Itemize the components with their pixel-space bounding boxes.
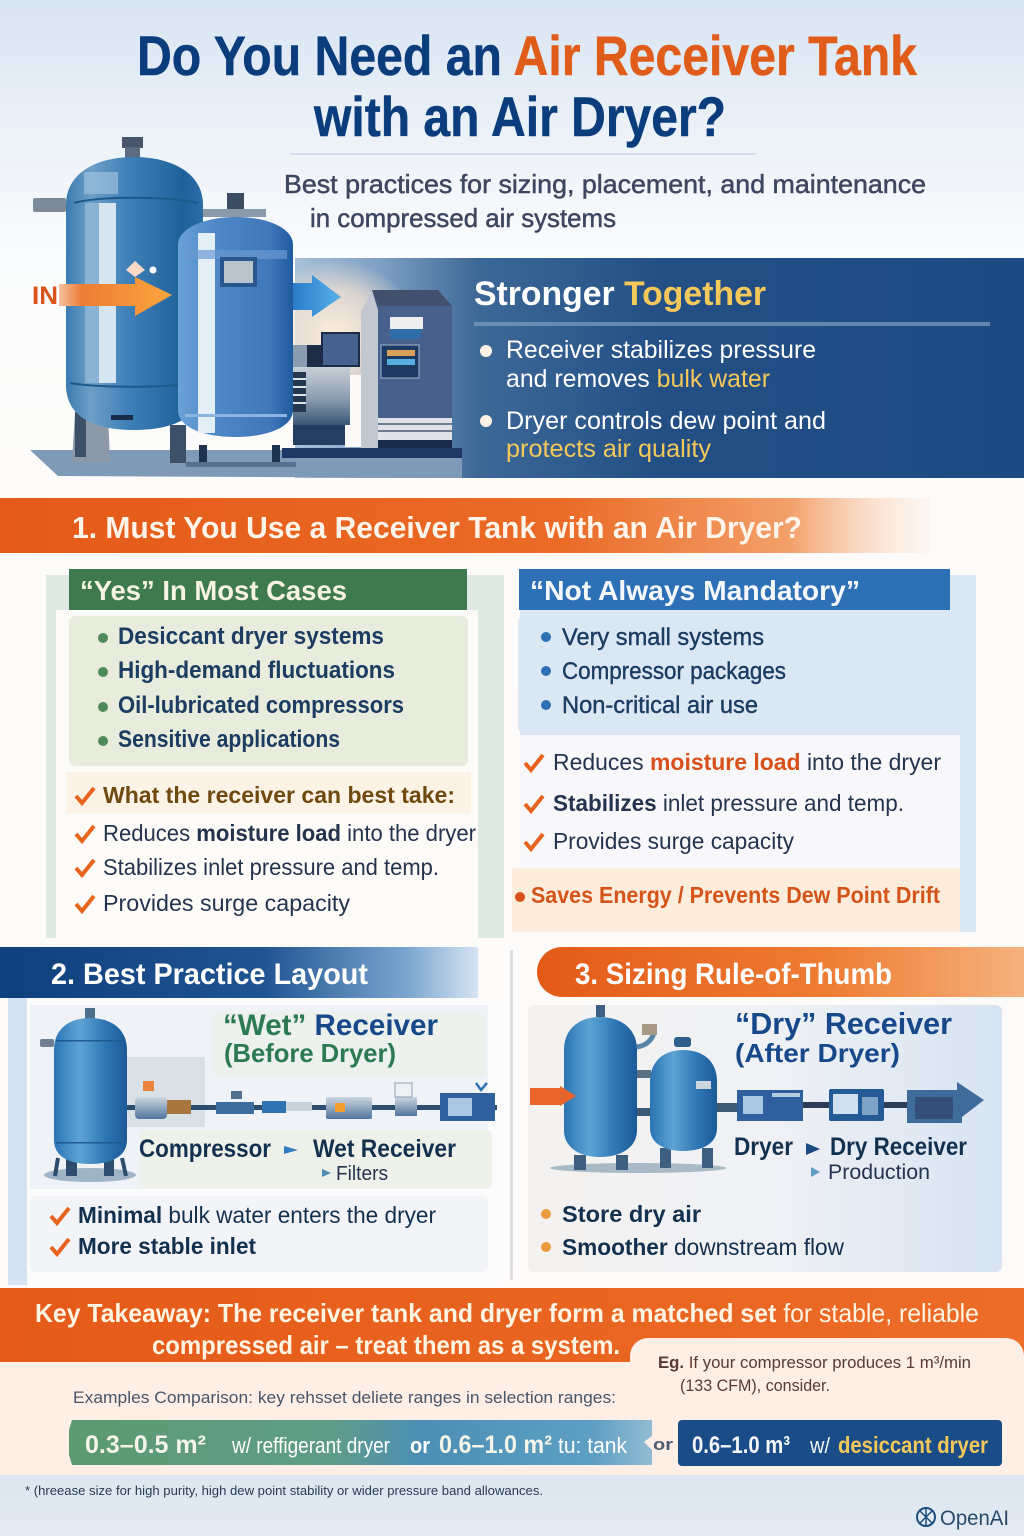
checklist: receiver benefits: Provides surge capacity <box>103 890 350 916</box>
key takeaway band: Key Takeaway: The receiver tank and dryer form a matched set for stable, reliable <box>35 1298 979 1328</box>
callout: saves energy: Saves Energy / Prevents Dew Point Drift <box>531 882 940 908</box>
labels: wet flow: Compressor <box>139 1135 271 1163</box>
list: dry receiver benefits: Smoother downstream flow <box>562 1234 844 1260</box>
pill: desiccant dryer range: desiccant dryer <box>838 1432 988 1458</box>
callout: saves energy <box>512 868 960 932</box>
bullet: receiver <box>480 336 816 393</box>
checklist: dryer benefits: Reduces moisture load into the dryer <box>553 749 941 775</box>
checklist: receiver benefits: Stabilizes inlet pressure and temp. <box>103 854 439 880</box>
subtitle <box>284 153 926 233</box>
text: sizing example <box>658 1353 971 1395</box>
list: not mandatory cases: Compressor packages <box>562 658 786 685</box>
heading: not always <box>519 569 950 610</box>
heading: dry receiver: “Dry” Receiver <box>735 1006 952 1041</box>
heading: wet receiver <box>212 1009 486 1078</box>
section 1 heading band <box>0 498 930 553</box>
pill: refrigerant dryer range: or <box>410 1433 430 1458</box>
pill: refrigerant dryer range: tu: tank <box>558 1433 628 1458</box>
checklist: dryer benefits: Stabilizes inlet pressure and temp. <box>553 790 904 816</box>
arrow: dry air in <box>530 1086 576 1106</box>
checklist: receiver benefits <box>66 772 476 916</box>
icon: wet receiver tank <box>40 1008 136 1182</box>
section 1 heading band: 1. Must You Use a Receiver Tank with an Air Dryer? <box>72 510 802 545</box>
text: sizing example: (133 CFM), consider. <box>680 1376 830 1395</box>
subtitle: Best practices for sizing, placement, and maintenance <box>284 169 926 199</box>
pill: refrigerant dryer range: 0.3–0.5 m² <box>85 1431 206 1459</box>
list: yes cases <box>69 616 468 766</box>
logo: OpenAI: OpenAI <box>940 1507 1009 1530</box>
heading: stronger together: Stronger Together <box>474 275 766 313</box>
checklist: receiver benefits: Reduces moisture load into the dryer <box>103 820 476 846</box>
checklist: dryer benefits <box>525 749 941 854</box>
pill: refrigerant dryer range <box>69 1420 652 1465</box>
checklist: wet receiver benefits: More stable inlet <box>78 1233 256 1259</box>
icon: dry receiver tanks <box>550 1005 726 1173</box>
panel: stronger together banner <box>250 258 1024 478</box>
section 2 heading band: 2. Best Practice Layout <box>51 958 368 991</box>
list: not mandatory cases: Very small systems <box>562 624 764 651</box>
heading: dry receiver <box>735 1006 952 1068</box>
panel: yes in most cases <box>46 569 504 938</box>
subtitle: in compressed air systems <box>310 203 616 233</box>
list: yes cases: Sensitive applications <box>118 726 340 753</box>
bullet: dryer <box>480 407 826 463</box>
heading: yes <box>69 569 467 610</box>
heading: not always: “Not Always Mandatory” <box>530 575 860 606</box>
bullet: receiver: and removes bulk water <box>506 365 770 393</box>
footer background <box>0 1475 1024 1536</box>
panel: lower peach background <box>0 1362 1024 1475</box>
list: not mandatory cases <box>518 616 951 733</box>
labels: wet flow: Filters <box>336 1163 388 1185</box>
list: yes cases: Desiccant dryer systems <box>118 623 384 650</box>
checklist: wet receiver benefits <box>30 1196 488 1272</box>
labels: wet flow: Wet Receiver <box>313 1135 456 1163</box>
diagram: wet pipeline <box>127 1057 497 1127</box>
pill: desiccant dryer range: w/ <box>809 1433 831 1458</box>
text: or: or <box>653 1435 673 1454</box>
pill: refrigerant dryer range: w/ reffigerant dryer <box>231 1433 390 1458</box>
icon: air dryer cabinet <box>361 290 452 448</box>
text: sizing example: Eg. If your compressor produces 1 m³/min <box>658 1353 971 1372</box>
key takeaway band: compressed air – treat them as a system. <box>152 1330 620 1360</box>
heading: wet receiver: “Wet” Receiver <box>223 1009 438 1042</box>
heading: yes: “Yes” In Most Cases <box>80 575 347 606</box>
title <box>137 24 918 148</box>
panel: dry receiver layout <box>528 947 1024 1272</box>
labels: wet flow <box>139 1130 492 1188</box>
labels: dry flow: Dryer <box>734 1133 793 1161</box>
footnote: * (hreease size for high purity, high dew point stability or wider pressure band allowances. <box>25 1483 543 1498</box>
list: dry receiver benefits: Store dry air <box>562 1201 701 1227</box>
icon: small receiver tank <box>178 193 296 467</box>
icon: compressor <box>293 333 361 447</box>
pill: refrigerant dryer range: 0.6–1.0 m² <box>439 1431 552 1459</box>
section 3 heading band <box>537 947 1024 997</box>
bullet: receiver: Receiver stabilizes pressure <box>506 336 816 364</box>
checklist: receiver benefits: What the receiver can best take: <box>103 782 455 808</box>
labels: dry flow: Production <box>828 1161 930 1184</box>
arrow: air in <box>59 277 172 316</box>
checklist: wet receiver benefits: Minimal bulk water enters the dryer <box>78 1202 436 1228</box>
labels: dry flow: Dry Receiver <box>830 1133 967 1161</box>
list: dry receiver benefits <box>541 1201 844 1260</box>
text: comparison caption: Examples Comparison: key rehsset deliete ranges in selection ranges: <box>73 1388 616 1407</box>
section 3 heading band: 3. Sizing Rule-of-Thumb <box>575 958 892 991</box>
platform <box>30 450 462 478</box>
bullet: dryer: Dryer controls dew point and <box>506 407 826 435</box>
text: IN label: IN <box>32 282 58 310</box>
labels: dry flow <box>734 1133 967 1184</box>
title: Do You Need an Air Receiver Tank <box>137 24 918 87</box>
checklist: dryer benefits: Provides surge capacity <box>553 828 794 854</box>
list: yes cases: High-demand fluctuations <box>118 657 395 684</box>
title: with an Air Dryer? <box>313 85 726 148</box>
panel: wet receiver layout <box>8 998 502 1285</box>
illustration: tanks and equipment <box>30 137 462 478</box>
list: not mandatory cases: Non-critical air use <box>562 692 758 719</box>
icon: large receiver tank <box>33 137 203 463</box>
panel: not always mandatory <box>512 569 976 932</box>
arrow: air out <box>293 275 341 317</box>
key takeaway band <box>0 1288 1024 1378</box>
list: yes cases: Oil-lubricated compressors <box>118 692 404 719</box>
heading: dry receiver: (After Dryer) <box>735 1038 900 1068</box>
bullet: dryer: protects air quality <box>506 435 711 463</box>
pill: desiccant dryer range: 0.6–1.0 m³ <box>692 1432 790 1459</box>
heading: wet receiver: (Before Dryer) <box>224 1038 396 1068</box>
diagram: dry pipeline <box>717 1082 984 1123</box>
section 2 heading band <box>0 947 478 998</box>
pill: desiccant dryer range <box>678 1420 1002 1466</box>
